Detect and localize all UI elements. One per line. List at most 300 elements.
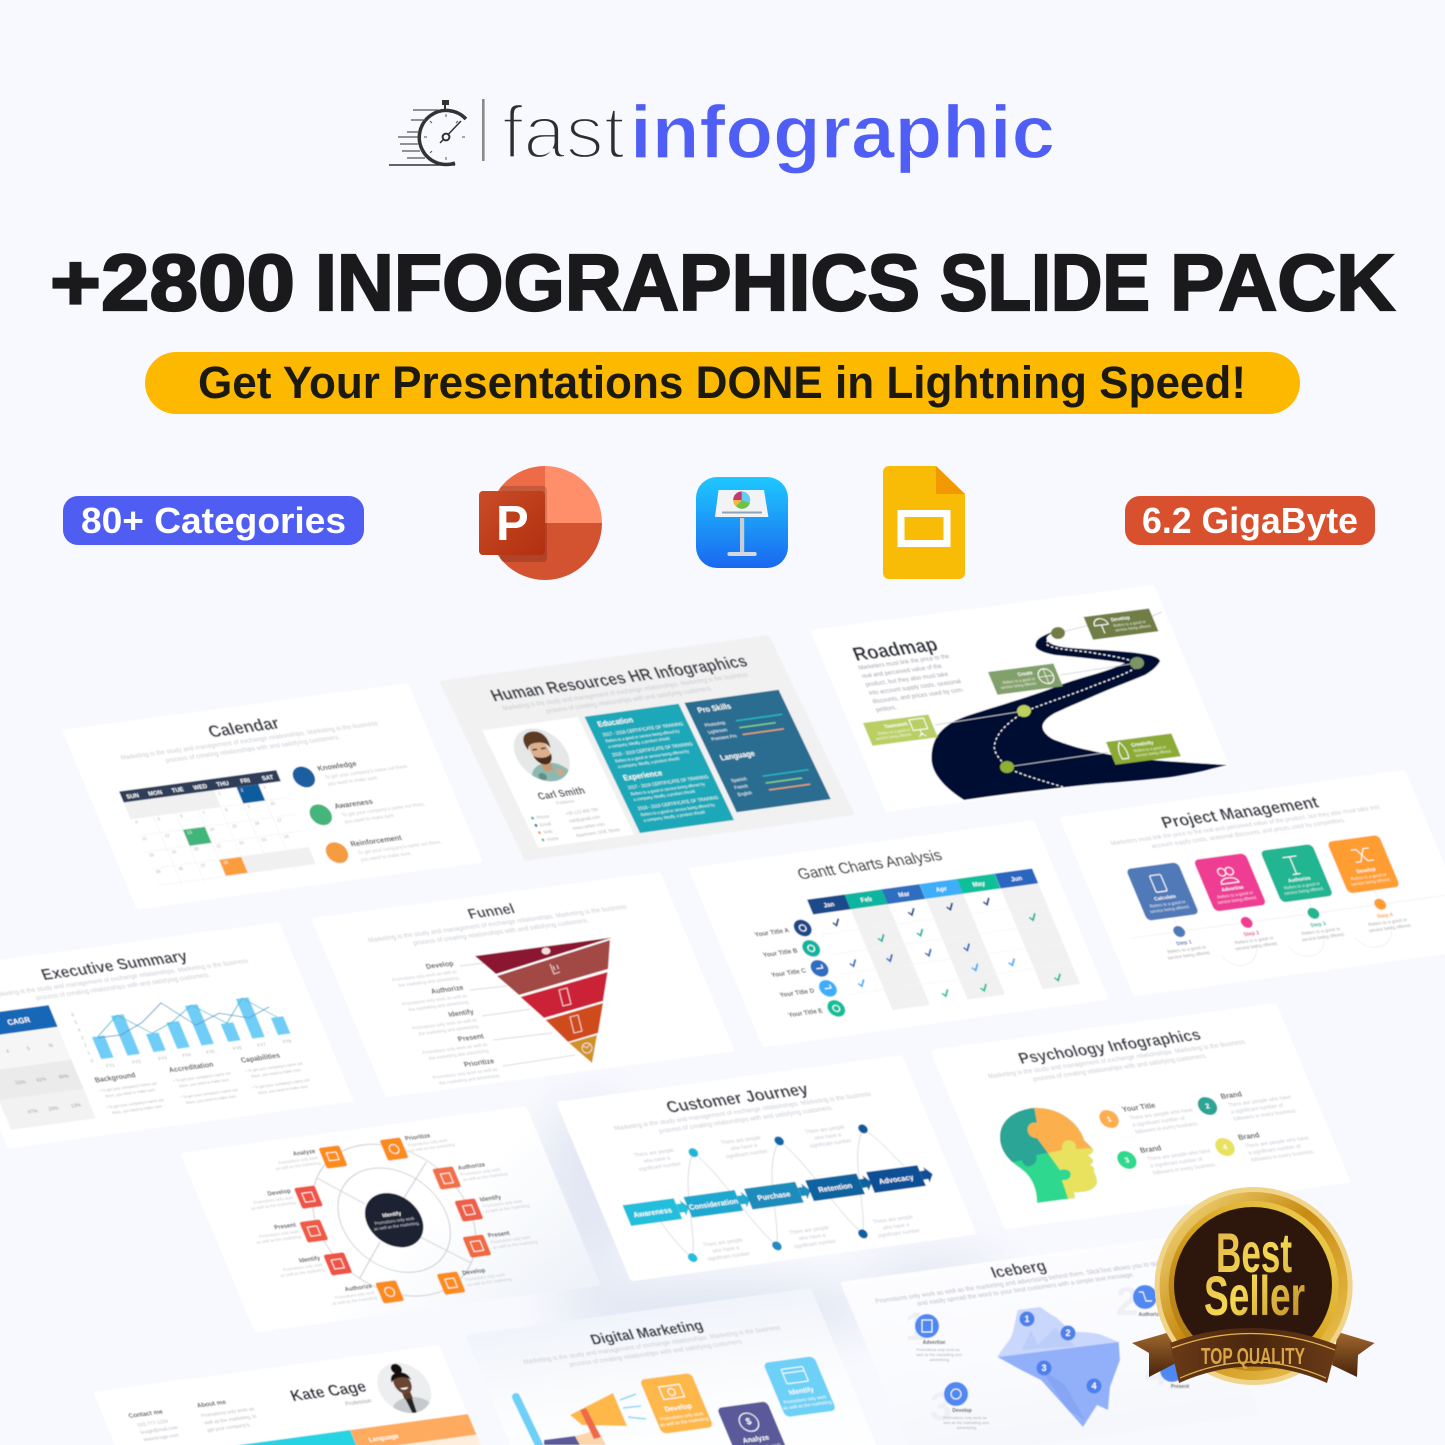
profile card: carl smith: Email — [539, 821, 552, 828]
gantt row titles: Your Title B — [762, 948, 799, 959]
about block: get your company's. — [206, 1422, 252, 1434]
iceberg card — [840, 1235, 1261, 1445]
wheel tiles — [271, 1131, 512, 1310]
step cards: service being offered. — [1350, 877, 1392, 887]
education and experience panel: Refers to a good or service being offered by — [604, 728, 681, 744]
roadmap description: discounts, and prices used by com- — [871, 687, 965, 705]
calendar grid: 4 — [134, 819, 139, 824]
step timeline: Step 2 — [1243, 930, 1261, 938]
iceberg step: develop — [930, 1382, 989, 1430]
panel: wheel slide — [180, 1106, 601, 1332]
icon: powerpoint — [479, 466, 602, 580]
calendar legend items: Awareness — [333, 797, 374, 811]
psychology items: There are people who have — [1129, 1107, 1194, 1122]
logo: fastinfographic — [389, 90, 1055, 174]
psychology items: There are people who have — [1146, 1148, 1212, 1163]
panel: kate cage slide — [128, 1362, 481, 1445]
combo chart: FY3 — [158, 1055, 168, 1061]
milestone: teamwork: Refers to a good or — [877, 727, 912, 736]
summary columns: Background — [93, 1070, 137, 1084]
psychology items: followers in every business. — [1250, 1149, 1316, 1163]
psychology items — [1095, 1083, 1316, 1181]
education and experience panel: Experience — [621, 768, 665, 783]
executive heading: Executive Summary — [39, 948, 190, 984]
cagr table: 80% — [58, 1073, 71, 1081]
wheel labels: Promotions only work — [282, 1262, 324, 1272]
milestone: teamwork — [863, 714, 938, 746]
wheel labels: Present — [487, 1230, 511, 1239]
wheel labels: Promotions only work — [253, 1195, 295, 1205]
roadmap description: petitors. — [875, 704, 899, 714]
wheel hub: Identify — [382, 1211, 402, 1219]
wheel labels: as well as the marketing — [331, 1295, 378, 1306]
summary columns: there, you need to make sure. — [185, 1093, 238, 1105]
combo chart: FY7 — [256, 1042, 267, 1048]
journey notes: who have a — [711, 1245, 740, 1255]
pro skills panel: Photoshop — [704, 720, 727, 728]
iceberg step: advertise: 1 — [905, 1305, 927, 1349]
wheel labels: Authorize — [344, 1283, 374, 1293]
funnel labels: the marketing and advertising. — [408, 1000, 471, 1013]
journey notes: significant number — [793, 1239, 837, 1250]
iceberg step: present: 4 — [1145, 1350, 1168, 1394]
funnel chart — [460, 938, 612, 1066]
about block: About me — [196, 1399, 228, 1410]
journey notes: who have a — [642, 1156, 671, 1165]
summary columns: • To get your company's name out — [98, 1080, 158, 1093]
wheel labels: as well as the marketing — [484, 1203, 531, 1214]
cagr table: N — [48, 1043, 54, 1049]
roadmap description: into account supply costs, seasonal — [868, 678, 962, 697]
education and experience panel: 2018 - 2019 CERTIFICATE OF TRAINING — [637, 795, 720, 811]
iceberg step: authorize — [1116, 1280, 1162, 1324]
cagr table: 61% — [36, 1077, 48, 1084]
wheel labels: Prioritize — [404, 1132, 432, 1142]
combo chart: FY8 — [282, 1039, 293, 1044]
education and experience panel: a company. Ideally, a product should — [607, 736, 671, 749]
identify card: Promotions only work — [783, 1394, 828, 1405]
calendar legend items: Knowledge — [316, 759, 358, 773]
iceberg graphic: 3 — [1041, 1363, 1047, 1373]
resume name: Kate Cage — [288, 1379, 369, 1405]
wheel labels: as well as the marketing — [466, 1276, 513, 1287]
iceberg subtitle: and easily spread the word to your best customers with a simple text message. — [916, 1271, 1136, 1308]
education and experience panel: a company. Ideally, a product should — [617, 756, 681, 769]
journey notes: There are people — [720, 1135, 762, 1146]
cagr table: 47% — [27, 1108, 39, 1115]
wheel labels: as well as the marketing — [275, 1160, 322, 1171]
customer journey subtitle: process of creating relationships with and satisfying customers. — [658, 1105, 835, 1135]
journey arrow blocks: Retention — [817, 1181, 854, 1194]
psychology items: Brand — [1138, 1143, 1163, 1155]
calendar grid: 19 — [170, 849, 178, 855]
education and experience panel: 2017 - 2018 CERTIFICATE OF TRAINING — [627, 774, 710, 790]
digital marketing subtitle: process of creating relationships with and satisfying customers — [568, 1338, 744, 1369]
contact block: www.kcage.com — [143, 1433, 180, 1443]
calendar grid: MON — [147, 789, 164, 798]
step cards: Refers to a good or — [1350, 872, 1388, 881]
gantt table: May — [971, 880, 987, 889]
ribbon text: TOP QUALITY — [1201, 1343, 1305, 1369]
develop card: as well as the marketing — [659, 1416, 709, 1428]
summary columns: there, you need to make sure. — [257, 1084, 310, 1095]
step timeline: service being offered. — [1301, 932, 1346, 942]
hr heading: Human Resources HR Infographics — [487, 651, 751, 705]
wheel hub: Promotions only work — [374, 1216, 416, 1226]
about block: Promotions only work as — [200, 1406, 256, 1419]
wheel labels: Identify — [479, 1194, 503, 1203]
combo chart: FY4 — [181, 1052, 192, 1058]
funnel labels: the marketing and advertising. — [428, 1048, 491, 1062]
step cards: Develop — [1356, 867, 1377, 875]
iceberg step: authorize: Authorize — [1138, 1312, 1162, 1318]
panel: human resources slide — [439, 635, 855, 861]
pro skills panel: Spanish — [730, 776, 748, 783]
milestone: creativity: service being offered. — [1135, 748, 1173, 758]
iceberg graphic: 1 — [1024, 1314, 1030, 1324]
journey notes: There are people — [804, 1125, 846, 1136]
psychology items: 3 — [1123, 1155, 1131, 1165]
journey notes: significant number — [725, 1149, 769, 1160]
hr subtitle: process of creating relationships with and satisfying customers. — [545, 685, 714, 715]
develop card — [639, 1373, 714, 1434]
funnel labels: Authorize — [429, 983, 465, 996]
cagr table: CAGR — [6, 1015, 32, 1027]
psychology items: There are people who have — [1227, 1094, 1292, 1109]
soft shadow glows — [540, 1100, 1005, 1334]
calendar legend items: you need to make sure. — [344, 813, 397, 825]
education and experience panel: Education — [596, 715, 635, 729]
combo chart: FY2 — [132, 1059, 142, 1065]
wheel labels: as well as the marketing — [279, 1267, 326, 1278]
gantt table: Feb — [860, 896, 873, 904]
profile card: carl smith: Professor — [555, 798, 576, 806]
psychology items: 2 — [1204, 1101, 1211, 1111]
medal — [1155, 1187, 1353, 1385]
psychology items: a significant number of — [1247, 1144, 1302, 1157]
profile card: carl smith: Web — [542, 829, 554, 835]
psychology heading: Psychology Infographics — [1016, 1027, 1204, 1068]
milestone: creativity: Refers to a good or — [1133, 744, 1168, 753]
funnel heading: Funnel — [465, 901, 518, 923]
digital marketing heading: Digital Marketing — [588, 1318, 706, 1348]
roadmap description — [857, 653, 969, 714]
customer journey heading: Customer Journey — [663, 1079, 812, 1117]
panel: psychology slide — [988, 1030, 1314, 1204]
executive subtitle: process of creating relationships with and satisfying customers. — [35, 972, 212, 1002]
iceberg step: present — [1145, 1350, 1190, 1394]
identify card — [763, 1356, 836, 1417]
contact block: Contact me — [127, 1409, 164, 1420]
road shape — [931, 630, 1227, 800]
calendar grid: SAT — [261, 774, 275, 782]
cagr table: 13% — [70, 1102, 83, 1110]
milestone: develop: service being offered. — [1114, 623, 1152, 633]
calendar grid: WED — [192, 783, 209, 792]
gantt row titles: Your Title A — [754, 927, 791, 939]
profile card: carl smith: Carl Smith — [536, 786, 587, 803]
calendar grid: 28 — [222, 860, 230, 865]
calendar grid — [119, 770, 317, 888]
funnel labels — [387, 959, 502, 1087]
funnel labels: Promotions only work as well as — [422, 1042, 489, 1056]
summary columns: • To get your company's name out — [244, 1061, 304, 1073]
wheel labels: Promotions only work — [482, 1198, 524, 1209]
calendar subtitle: Marketing is the study and management of exchange relationships. Marketing is the business — [120, 720, 380, 762]
profile card: carl smith: Home — [546, 836, 560, 842]
journey curves — [635, 1126, 929, 1260]
resume photo — [377, 1362, 432, 1414]
wheel rings — [287, 1135, 501, 1306]
iceberg step: present: Present — [1171, 1384, 1190, 1390]
combo chart — [71, 985, 294, 1070]
milestone: creativity: Creativity — [1130, 740, 1155, 749]
step timeline: Step 1 — [1175, 939, 1193, 947]
journey notes: who have a — [797, 1233, 827, 1242]
iceberg subtitle: Promotions only work as well as the marketing and advertising behind them. SlickText allows you to quickly — [874, 1259, 1172, 1305]
calendar grid: 20 — [193, 846, 200, 851]
wheel labels — [222, 1123, 559, 1312]
education and experience panel: a company. Ideally, a product should — [632, 789, 696, 802]
calendar grid: 1 — [217, 791, 222, 796]
combo chart: 1 — [86, 1050, 91, 1055]
iceberg step: develop: Develop — [952, 1408, 972, 1414]
funnel labels: the marketing and advertising. — [418, 1024, 481, 1037]
combo chart: 4 — [77, 1027, 82, 1033]
journey notes: There are people — [633, 1148, 675, 1159]
iceberg step: develop: Promotions only work as — [943, 1415, 987, 1420]
tagline pill: Get Your Presentations DONE in Lightning Speed! — [198, 357, 1246, 408]
combo chart: 5 — [74, 1020, 79, 1025]
step timeline: Refers to a good or — [1166, 944, 1207, 954]
calendar legend items: Reinforcement — [349, 833, 404, 849]
wheel hub: as well as the marketing. — [373, 1220, 420, 1231]
calendar legend items: you need to make sure. — [327, 775, 380, 788]
summary columns: Accreditation — [167, 1060, 215, 1074]
panel: iceberg slide — [840, 1235, 1261, 1445]
wheel labels: as well as the marketing — [250, 1200, 297, 1211]
summary columns: there, you need to make sure. — [178, 1077, 231, 1088]
wheel labels: Promotions only work — [334, 1290, 376, 1300]
iceberg step: advertise — [905, 1305, 962, 1362]
milestone: teamwork: service being offered. — [875, 732, 913, 741]
ribbon band — [1170, 1328, 1337, 1383]
calendar grid: SUN — [125, 792, 141, 801]
summary columns: • To get your company's name out — [105, 1097, 165, 1110]
gantt row titles: Your Title E — [787, 1008, 825, 1019]
step cards: Advertise — [1221, 885, 1245, 893]
funnel card — [311, 872, 735, 1097]
calendar grid: 23 — [260, 837, 268, 842]
iceberg graphic — [998, 1307, 1120, 1427]
gantt row titles — [751, 919, 848, 1023]
journey notes: significant number — [707, 1251, 751, 1263]
calendar grid: 7 — [202, 810, 207, 815]
digital marketing subtitle: Marketing is the study and management of exchange relationships. Marketing is the business — [522, 1324, 782, 1366]
medal text: best: Best — [1216, 1221, 1292, 1284]
psychology items: Your Title — [1121, 1101, 1157, 1114]
journey arrow blocks: Consideration — [687, 1197, 740, 1212]
calendar grid: 18 — [148, 852, 155, 858]
milestone: develop: Develop — [1110, 615, 1131, 623]
gantt row titles: Your Title C — [770, 968, 808, 979]
icon: google slides — [883, 466, 965, 579]
calendar grid: 21 — [215, 843, 223, 848]
journey notes: significant number — [638, 1161, 682, 1173]
step cards: Refers to a good or — [1216, 890, 1254, 900]
logo word: fast: fast — [502, 90, 625, 174]
icon: powerpoint: P — [496, 497, 529, 551]
iceberg step: advertise: well as the marketing and — [916, 1352, 962, 1357]
combo chart: FY1 — [105, 1063, 116, 1068]
cagr table — [0, 1005, 96, 1130]
panel: funnel slide — [311, 872, 735, 1097]
calendar grid: 22 — [238, 840, 245, 845]
education and experience panel: Refers to a good or service being offered by — [630, 781, 707, 796]
pro skills panel: Premiere Pro — [710, 733, 738, 742]
psychology items: Brand — [1219, 1089, 1244, 1101]
main title: PACK — [1170, 238, 1395, 327]
funnel labels: Promotions only work as well as — [391, 969, 459, 983]
analyze card: Analyze — [741, 1433, 771, 1445]
combo chart: FY6 — [232, 1045, 243, 1051]
combo chart: 0 — [90, 1058, 95, 1063]
pro skills panel — [685, 690, 831, 812]
calendar grid: 12 — [164, 833, 171, 838]
develop card: Promotions only work — [659, 1411, 705, 1422]
roadmap heading: Roadmap — [850, 635, 941, 666]
journey notes: There are people — [788, 1225, 830, 1236]
psychology subtitle: Marketing is the study and management of exchange relationships. Marketing is the business — [987, 1039, 1247, 1080]
psychology items: 1 — [1105, 1114, 1113, 1124]
gantt table: Mar — [897, 891, 912, 899]
analyze card: $ — [744, 1415, 754, 1427]
calendar grid: 11 — [141, 836, 148, 841]
combo chart: 3 — [80, 1035, 85, 1040]
develop card: Develop — [663, 1401, 694, 1414]
journey notes: significant number — [809, 1138, 853, 1150]
roadmap card — [810, 585, 1230, 812]
calendar grid: 15 — [231, 823, 238, 829]
wheel labels: Promotions only work — [407, 1137, 449, 1148]
logo word: infographic: infographic — [630, 90, 1055, 174]
roadmap description: real and perceived value of the — [861, 663, 944, 680]
journey dots — [645, 1124, 911, 1263]
main title: SLIDE — [940, 238, 1150, 327]
summary columns: • To get your company's name out — [179, 1087, 239, 1100]
profile card: carl smith: www.carlsm.com — [571, 821, 606, 831]
gantt heading: Gantt Charts Analysis — [795, 847, 945, 883]
education and experience panel: 2017 - 2018 CERTIFICATE OF TRAINING — [602, 721, 685, 737]
wheel labels: as well as the marketing — [462, 1171, 509, 1182]
calendar grid: 24 — [283, 834, 290, 839]
milestone: develop — [1084, 608, 1158, 640]
wheel hub — [356, 1190, 432, 1251]
calendar legend items: To get your company's name out there, — [341, 801, 426, 819]
wheel labels: as well as the marketing — [409, 1142, 456, 1153]
cagr table: 4 — [5, 1049, 11, 1055]
pro skills panel: Pro Skills — [696, 702, 733, 715]
calendar grid: THU — [215, 780, 231, 788]
milestone: create: service being offered. — [1000, 681, 1038, 690]
iceberg heading: Iceberg — [988, 1258, 1049, 1282]
wheel labels: Promotions only work — [490, 1234, 532, 1245]
calendar legend items: To get your company's name out there, — [357, 839, 443, 856]
pro skills panel: Language — [718, 749, 757, 762]
calendar subtitle: process of creating relationships with and satisfying customers. — [165, 734, 341, 764]
journey notes: who have a — [881, 1222, 911, 1232]
digital marketing card — [465, 1288, 886, 1445]
psychology items: 4 — [1221, 1142, 1229, 1152]
journey arrow blocks — [622, 1164, 937, 1226]
wheel labels: Authorize — [457, 1161, 487, 1172]
journey notes — [632, 1120, 921, 1267]
medal text: seller: Seller — [1204, 1264, 1305, 1327]
wheel labels: as well as the marketing — [492, 1239, 539, 1250]
calendar grid: 9 — [247, 804, 251, 809]
milestone: create — [988, 663, 1063, 695]
identify card: as well as the marketing — [782, 1399, 833, 1411]
gantt table: Jun — [1010, 875, 1024, 883]
funnel labels: Present — [456, 1031, 486, 1043]
funnel labels: Promotions only work as well as — [401, 993, 469, 1008]
psychology items: followers in every business. — [1152, 1162, 1218, 1176]
step cards: service being offered. — [1217, 895, 1258, 905]
main title — [50, 238, 1395, 327]
wheel labels: as well as the marketing — [255, 1234, 302, 1245]
step cards: service being offered. — [1283, 886, 1325, 896]
step timeline: service being offered. — [1234, 941, 1279, 951]
slide mockups — [0, 585, 1445, 1445]
cagr table: 53% — [15, 1079, 27, 1086]
calendar grid: 25 — [155, 869, 162, 874]
summary columns: • To get your company's name out — [172, 1070, 232, 1083]
step cards: service being offered. — [1149, 904, 1191, 914]
step timeline: service being offered. — [1368, 923, 1413, 933]
icon: stopwatch — [389, 100, 466, 165]
step timeline: Refers to a good or — [1301, 926, 1342, 936]
iceberg step: authorize: 2 — [1116, 1280, 1138, 1324]
wheel labels: Promotions only work — [464, 1272, 506, 1282]
road milestones — [1000, 627, 1144, 773]
wheel labels: Promotions only work — [258, 1229, 300, 1239]
funnel subtitle: process of creating relationships with and satisfying customers. — [412, 917, 590, 947]
education and experience panel: Refers to a good or service being offered by — [614, 748, 691, 764]
panel: digital marketing slide — [465, 1288, 886, 1445]
road centre line and connectors — [935, 612, 1162, 787]
funnel labels: the marketing and advertising. — [398, 975, 461, 989]
project heading: Project Management — [1158, 793, 1322, 832]
wheel labels: Analyze — [292, 1148, 317, 1158]
gantt row titles: Your Title D — [779, 988, 816, 999]
profile card: carl smith: Phone — [536, 814, 551, 820]
calendar grid: 6 — [179, 813, 184, 818]
psychology items: a significant number of — [1230, 1103, 1285, 1116]
resume profession: Profession — [345, 1398, 373, 1408]
gantt table: Apr — [935, 886, 949, 894]
calendar grid: 3 — [262, 784, 267, 790]
contact block: kcage@mail.com — [140, 1425, 179, 1436]
calendar grid: 14 — [209, 826, 216, 832]
wheel labels: Promotions only work — [460, 1167, 502, 1177]
panel: calendar slide — [62, 683, 483, 909]
funnel labels: Identify — [447, 1007, 475, 1019]
step timeline: service being offered. — [1167, 950, 1212, 961]
calendar legend items: you need to make sure. — [360, 851, 413, 863]
calendar legend items — [289, 752, 446, 868]
education and experience panel: Refers to a good or service being offered by — [640, 802, 716, 817]
combo chart: 2 — [83, 1043, 88, 1048]
